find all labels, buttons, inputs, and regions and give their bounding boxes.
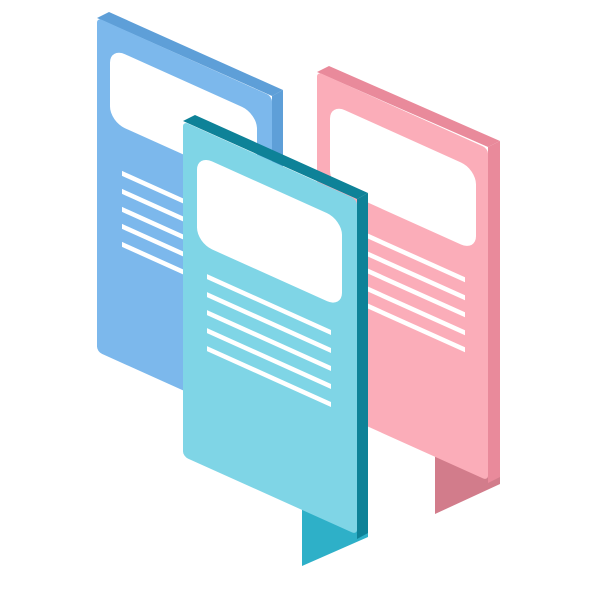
card: blue: [97, 12, 283, 431]
card: cyan: [183, 115, 368, 566]
card: pink: [317, 66, 500, 514]
